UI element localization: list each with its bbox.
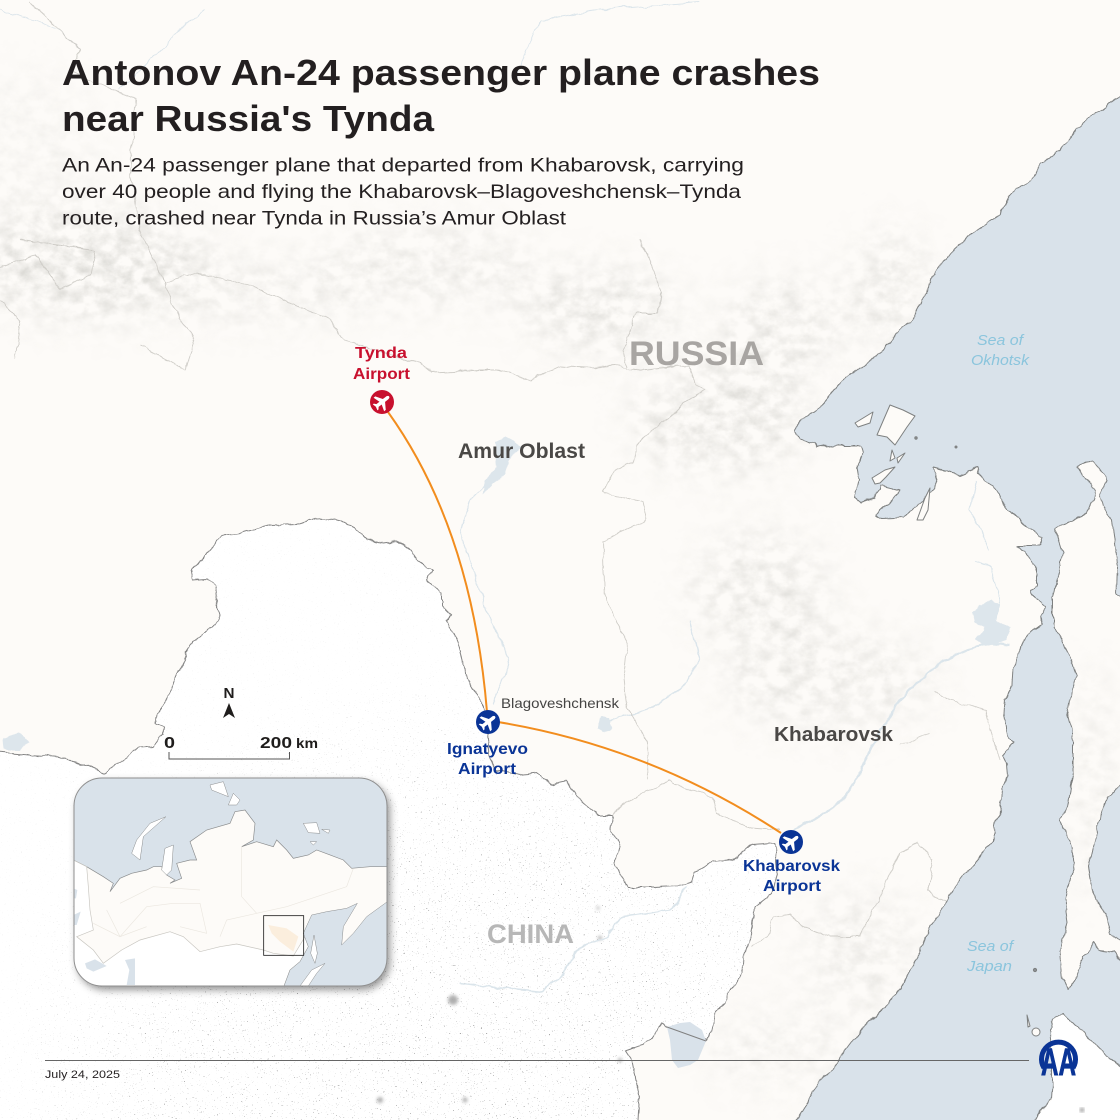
scale bar: 200 — [260, 735, 292, 752]
north arrow: N — [224, 685, 234, 702]
label: Tynda Airport — [353, 345, 411, 383]
logo: Anadolu Agency: AA — [1041, 1042, 1076, 1084]
footer rule — [45, 1060, 1029, 1062]
label: Khabarovsk region: Khabarovsk — [774, 723, 894, 746]
icon: Ignatyevo Airport plane — [476, 710, 500, 734]
Hokkaido — [1030, 1013, 1120, 1120]
label: Russia: RUSSIA — [629, 335, 764, 373]
icon: Tynda Airport plane — [370, 390, 394, 414]
region boundaries — [0, 1, 1000, 947]
label: China: CHINA — [487, 919, 574, 949]
label: Ignatyevo Airport: Ignatyevo — [447, 741, 528, 758]
city density blobs in China — [377, 906, 622, 1103]
inset: Sakhalin and Japan — [300, 935, 325, 986]
islands — [855, 405, 1040, 1036]
label: Sea of Japan: Sea of — [967, 938, 1015, 955]
inset: internal borders — [93, 847, 353, 937]
sea east of Sakhalin — [1088, 778, 1120, 948]
label: Sea of Japan — [966, 938, 1015, 975]
lake blobs — [3, 437, 1010, 750]
scale bar: km — [296, 735, 318, 751]
scale bar — [164, 735, 318, 759]
label: Sea of Okhotsk: Okhotsk — [971, 352, 1031, 369]
locator inset map — [73, 778, 387, 986]
subtitle: over 40 people and flying the Khabarovsk–Blagoveshchensk–Tynda — [62, 181, 741, 203]
inset: Sea of Okhotsk and Pacific — [284, 902, 387, 986]
logo: Anadolu Agency — [1041, 1042, 1076, 1084]
label: Sea of Japan: Japan — [966, 958, 1012, 975]
label: Ignatyevo Airport — [447, 741, 528, 778]
Lake Khanka — [667, 1022, 706, 1068]
label: Sea of Okhotsk: Sea of — [977, 332, 1025, 349]
subtitle: An An-24 passenger plane that departed from Khabarovsk, carrying — [62, 154, 744, 176]
label: Ignatyevo Airport: Airport — [458, 761, 517, 778]
label: Khabarovsk Airport: Airport — [763, 878, 822, 895]
subtitle — [62, 154, 744, 230]
inset: surrounding white countries — [73, 860, 308, 986]
neighbouring countries: China and others — [0, 500, 800, 1120]
flight route: Blagoveshchensk to Tynda — [388, 412, 487, 712]
rivers and lakes — [0, 2, 1010, 992]
label: Sea of Okhotsk — [971, 332, 1031, 369]
title: Antonov An-24 passenger plane crashes — [62, 52, 820, 93]
flight route: Khabarovsk to Blagoveshchensk — [498, 722, 781, 833]
subtitle: route, crashed near Tynda in Russia’s Amur Oblast — [62, 208, 567, 230]
label: Tynda Airport: Airport — [353, 366, 411, 383]
inset: locator box — [264, 916, 304, 955]
label: Khabarovsk Airport: Khabarovsk — [743, 858, 840, 875]
title: near Russia's Tynda — [62, 98, 435, 139]
label: Blagoveshchensk: Blagoveshchensk — [501, 695, 620, 711]
label: Tynda Airport: Tynda — [355, 345, 407, 362]
inset: Amur Oblast highlight — [268, 925, 298, 952]
inset: Arctic islands — [132, 782, 330, 875]
scale bar: 0 — [164, 735, 175, 752]
inset: inland seas — [73, 888, 135, 985]
inset: Russia landmass — [74, 810, 386, 963]
date: July 24, 2025 — [45, 1069, 120, 1081]
sea — [790, 88, 1120, 1120]
label: Khabarovsk Airport — [743, 858, 840, 895]
icon: Khabarovsk Airport plane — [779, 830, 803, 854]
title — [62, 52, 820, 139]
label: Amur Oblast: Amur Oblast — [458, 440, 585, 463]
north arrow — [223, 685, 235, 718]
